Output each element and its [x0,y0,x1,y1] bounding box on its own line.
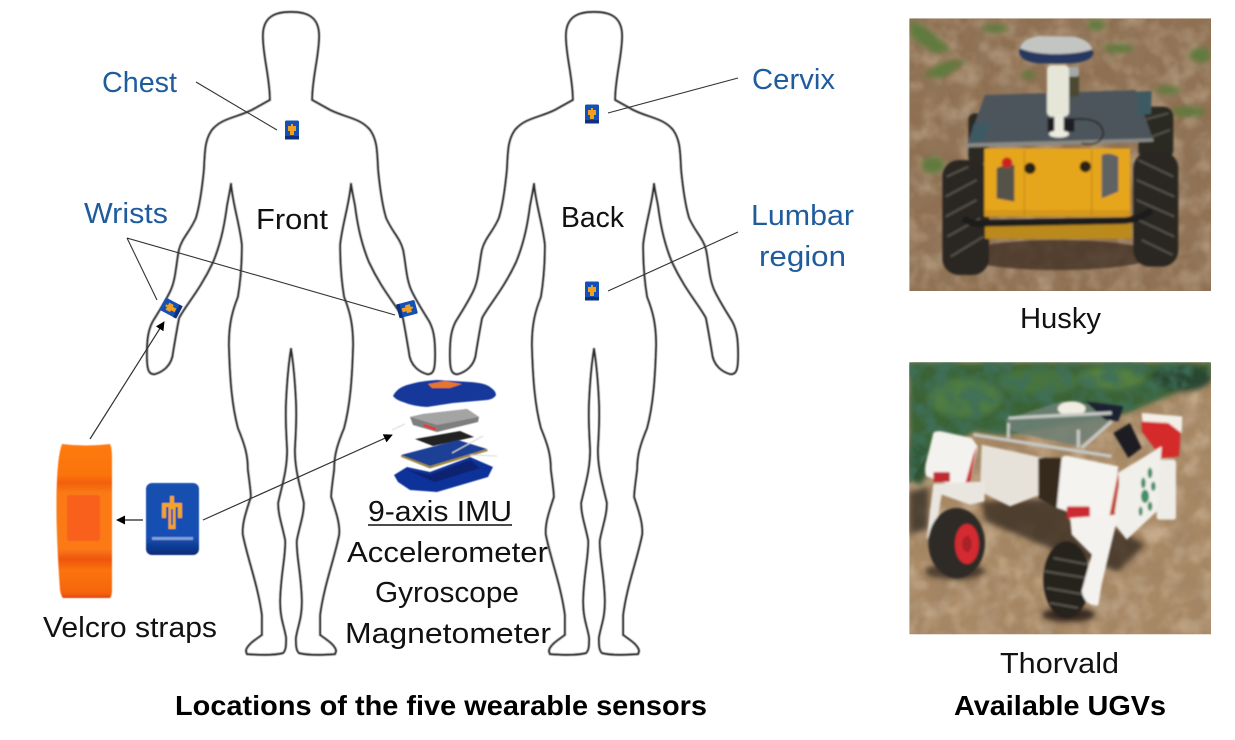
sensor icon: cervix [585,104,599,124]
caption: Available UGVs: Available UGVs [954,690,1166,721]
arrow: strap to wrist [90,322,164,439]
icon: blue sensor module [146,483,199,555]
text: Velcro straps: Velcro straps [43,612,217,644]
label: Chest: Chest [102,67,177,99]
sensor icon: left wrist [159,297,183,319]
label: Lumbar region [751,200,854,273]
leader line: chest [196,82,277,130]
figure: front body outline [147,12,435,655]
text: Gyroscope: Gyroscope [375,577,519,609]
leader line: lumbar [608,232,738,291]
photo: Thorvald robot [908,362,1212,634]
sensor icon: chest [285,120,299,140]
label: Thorvald: Thorvald [1000,648,1119,680]
heading: 9-axis IMU: 9-axis IMU [368,496,512,528]
caption: locations of sensors: Locations of the five wearable sensors [175,690,707,721]
sensor icon: lumbar [585,282,599,300]
arrow: sensor to IMU [203,435,392,520]
figure: back body outline [450,12,738,655]
label: Back: Back [561,202,624,234]
label: Husky: Husky [1020,303,1101,335]
arrow: sensor to strap [117,519,143,521]
icon: exploded 9-axis IMU [392,380,497,492]
label: Wrists: Wrists [84,198,168,230]
text: Magnetometer: Magnetometer [345,618,551,650]
sensor icon: right wrist [396,300,418,318]
leader line: cervix [608,78,738,113]
text: Accelerometer: Accelerometer [347,537,548,569]
label: Cervix: Cervix [752,64,836,96]
photo: Husky robot [909,18,1211,291]
icon: orange velcro strap [56,444,112,598]
label: Lumbar region: region [759,241,846,273]
label: Front: Front [256,204,328,236]
leader lines: wrists [127,238,395,315]
label: Lumbar region: Lumbar [751,200,854,232]
